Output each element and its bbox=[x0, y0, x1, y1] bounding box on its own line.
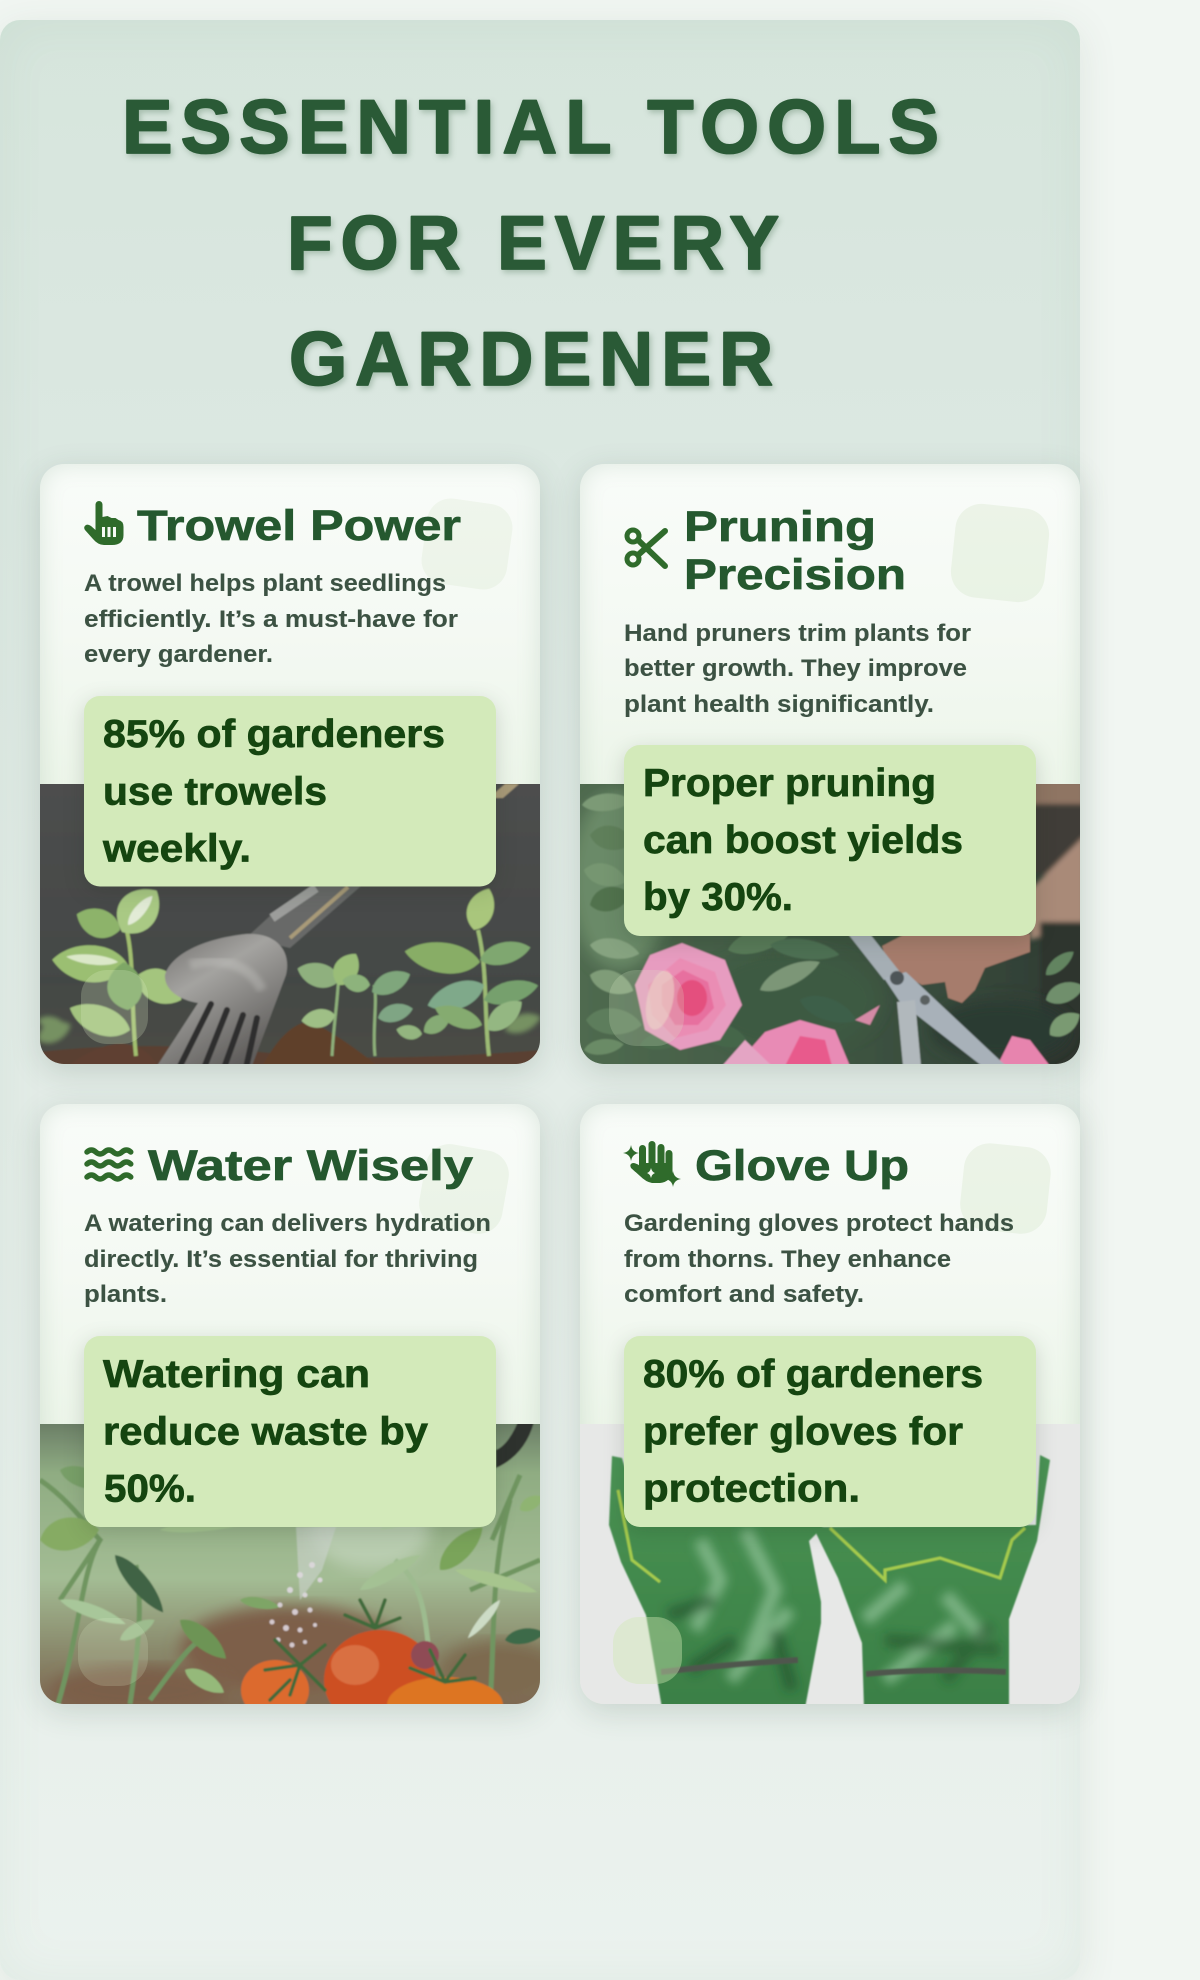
description: plant health significantly. bbox=[624, 691, 934, 718]
description: every gardener. bbox=[84, 641, 273, 668]
title bbox=[122, 85, 947, 402]
description: efficiently. It’s a must-have for bbox=[84, 606, 458, 633]
heading: Pruning bbox=[684, 503, 876, 551]
description bbox=[624, 620, 971, 718]
callout: protection. bbox=[643, 1468, 860, 1510]
heading: Glove Up bbox=[695, 1142, 909, 1190]
description: Hand pruners trim plants for bbox=[624, 620, 971, 647]
callout: by 30%. bbox=[643, 876, 793, 919]
title: ESSENTIAL TOOLS bbox=[122, 85, 947, 170]
callout bbox=[84, 696, 496, 886]
decorative blob bottom bbox=[78, 1618, 148, 1686]
decorative blob bottom bbox=[613, 1617, 682, 1684]
watering photo illustration bbox=[40, 1424, 540, 1704]
description: A watering can delivers hydration bbox=[84, 1210, 491, 1237]
tomatoes bbox=[240, 1598, 504, 1704]
plants bbox=[40, 1475, 540, 1704]
icon: scissors bbox=[627, 530, 665, 566]
callout: weekly. bbox=[102, 828, 251, 870]
callout: use trowels bbox=[103, 770, 327, 814]
decorative blob top bbox=[958, 1141, 1053, 1236]
description: directly. It’s essential for thriving bbox=[84, 1246, 478, 1273]
small roses bbox=[722, 1005, 1050, 1066]
rose bbox=[635, 943, 742, 1050]
decorative blob bottom bbox=[609, 970, 684, 1046]
right glove bbox=[813, 1455, 1050, 1708]
description: A trowel helps plant seedlings bbox=[84, 570, 446, 597]
decorative blob bottom bbox=[81, 970, 148, 1044]
trowel bbox=[157, 886, 361, 1068]
foliage bbox=[581, 791, 1087, 1057]
center seedlings bbox=[294, 947, 454, 1056]
trowel photo illustration bbox=[34, 782, 543, 1068]
decorative blob top bbox=[415, 1140, 513, 1238]
callout: 50%. bbox=[104, 1468, 196, 1510]
description: comfort and safety. bbox=[624, 1281, 864, 1308]
description: plants. bbox=[84, 1281, 167, 1308]
hand bbox=[882, 934, 1030, 1003]
card: Pruning Precision bbox=[580, 464, 1080, 1064]
card: Trowel Power bbox=[40, 464, 540, 1064]
callout: Proper pruning bbox=[643, 762, 936, 805]
heading: Water Wisely bbox=[148, 1142, 473, 1190]
description: better growth. They improve bbox=[624, 655, 967, 682]
watering can bbox=[496, 1422, 534, 1468]
callout: prefer gloves for bbox=[643, 1410, 963, 1454]
description: Gardening gloves protect hands bbox=[624, 1210, 1014, 1237]
heading bbox=[684, 503, 906, 599]
water spray bbox=[270, 1527, 336, 1648]
card: Water Wisely bbox=[40, 1104, 540, 1704]
arm bbox=[1030, 780, 1084, 1068]
callout: reduce waste by bbox=[103, 1410, 428, 1454]
description bbox=[624, 1210, 1014, 1308]
callout bbox=[84, 1336, 496, 1527]
background foliage blurs bbox=[570, 790, 1070, 1060]
callout: can boost yields bbox=[643, 819, 963, 862]
decorative blob top bbox=[948, 501, 1052, 605]
callout: 80% of gardeners bbox=[643, 1353, 983, 1396]
heading: Precision bbox=[684, 551, 906, 599]
left glove bbox=[609, 1456, 825, 1708]
pruning photo illustration bbox=[570, 780, 1087, 1068]
left seedling bbox=[52, 888, 182, 1058]
title: FOR EVERY bbox=[287, 201, 787, 286]
title: GARDENER bbox=[289, 317, 781, 402]
leaves bbox=[37, 1460, 546, 1699]
description bbox=[84, 1210, 491, 1308]
icon: hand pointer bbox=[84, 501, 124, 545]
right seedling bbox=[402, 884, 541, 1056]
callout bbox=[624, 745, 1036, 936]
callout: 85% of gardeners bbox=[103, 713, 445, 756]
gloves photo illustration bbox=[580, 1424, 1080, 1708]
callout bbox=[624, 1336, 1036, 1527]
callout: Watering can bbox=[103, 1353, 370, 1396]
card: Glove Up bbox=[580, 1104, 1080, 1704]
heading: Trowel Power bbox=[137, 502, 461, 550]
decorative blob top bbox=[418, 495, 516, 593]
icon: clean hand with sparkles bbox=[623, 1141, 681, 1187]
description: from thorns. They enhance bbox=[624, 1246, 951, 1273]
description bbox=[84, 570, 458, 668]
pruners bbox=[848, 934, 1006, 1066]
icon: water waves bbox=[87, 1150, 131, 1179]
